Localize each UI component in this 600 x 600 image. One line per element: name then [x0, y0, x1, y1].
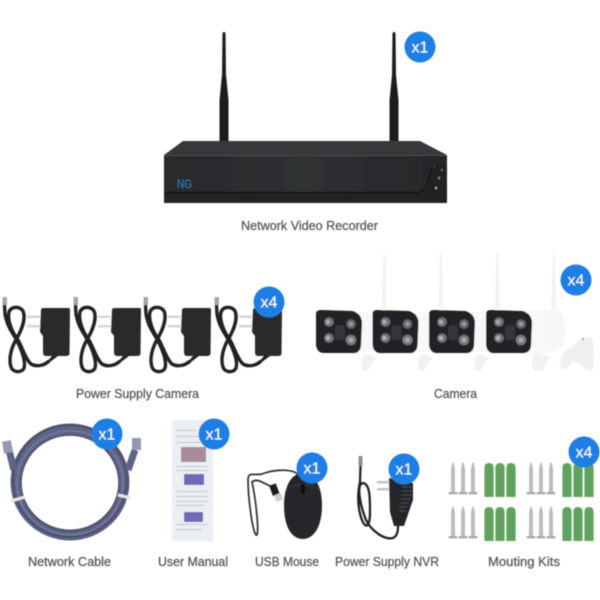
icon: antennas: [220, 32, 398, 141]
icon: camera antennas: [382, 254, 556, 310]
heading: power supply nvr label: Power Supply NVR: [335, 554, 439, 569]
badge: x4 adapters: x4: [261, 294, 278, 312]
icon: nvr adapter and cable: [358, 456, 413, 538]
panel: network cable: [2, 418, 141, 569]
icon: four camera fronts: [316, 310, 546, 371]
panel: network video recorder: [164, 32, 447, 233]
heading: mounting kits label: Mouting Kits: [488, 554, 560, 569]
badge: x1 recorder: x1: [412, 40, 429, 56]
icon: last camera body and wall mount: [525, 310, 594, 371]
badge: x1 manual: x1: [206, 426, 223, 444]
badge: x1 cable: [92, 418, 122, 450]
badge: x1 manual: [198, 418, 230, 450]
badge: x4 adapters: [254, 286, 284, 318]
heading: network cable label: Network Cable: [28, 554, 111, 569]
icon: recorder body: [164, 141, 447, 203]
icon: manual sheet: [172, 420, 213, 541]
heading: camera label: Camera: [434, 386, 478, 401]
icon: coiled ethernet cable: [2, 425, 141, 537]
badge: x1 recorder: [404, 32, 436, 62]
panel: cameras: [316, 254, 594, 401]
icon: four power adapters: [2, 297, 282, 372]
heading: network video recorder label: Network Video Recorder: [241, 218, 379, 233]
heading: usb mouse label: USB Mouse: [255, 554, 319, 569]
panel: user manual: [158, 418, 230, 569]
icon: screws and anchors: [448, 462, 594, 541]
badge: x4 kits: x4: [576, 444, 593, 462]
icon: mouse and cable: [248, 470, 322, 539]
panel: power supply nvr: [335, 454, 439, 569]
panel: power supply camera: [2, 286, 284, 401]
logo: NG: [177, 179, 192, 191]
badge: x1 mouse: x1: [304, 460, 321, 478]
panel: mounting kits: [448, 436, 600, 569]
heading: power supply camera label: Power Supply Camera: [76, 386, 200, 401]
badge: x1 cable: x1: [99, 426, 116, 444]
badge: x4 kits: [568, 436, 600, 468]
heading: user manual label: User Manual: [158, 554, 228, 569]
badge: x4 cameras: [560, 264, 592, 296]
badge: x1 nvr adapter: x1: [396, 462, 413, 478]
badge: x4 cameras: x4: [568, 272, 585, 290]
panel: usb mouse: [248, 452, 328, 569]
